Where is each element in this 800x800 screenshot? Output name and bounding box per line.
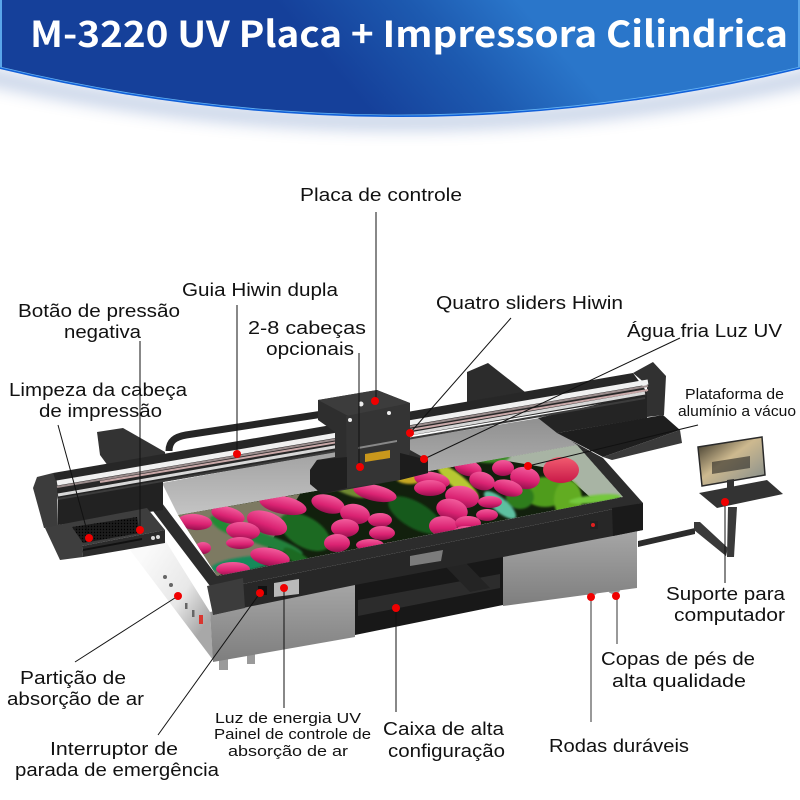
label: copas de pes [601, 649, 755, 691]
label: plataforma de aluminio: Plataforma de [685, 386, 784, 403]
left control platform [45, 508, 165, 560]
right grey panel [503, 531, 637, 606]
table side panel [130, 540, 213, 660]
front switch and panel [258, 579, 299, 597]
gantry beam [33, 362, 666, 528]
label: suporte para computador: computador [674, 605, 785, 625]
label: particao de absorcao: Partição de [20, 668, 126, 688]
printer illustration [33, 362, 682, 670]
label: placa de controle: Placa de controle [300, 185, 462, 205]
label: limpeza da cabeca [9, 380, 188, 421]
label: particao de absorcao [7, 668, 144, 709]
label: limpeza da cabeca: de impressão [39, 401, 162, 421]
label: caixa de alta configuracao: Caixa de alta [383, 719, 505, 739]
label: luz de energia uv e painel: absorção de ar [228, 743, 348, 760]
header banner [0, 0, 800, 122]
table feet [219, 586, 620, 670]
label: cabecas opcionais: opcionais [266, 339, 354, 359]
label: interruptor de parada: Interruptor de [50, 739, 178, 759]
label: cabecas opcionais: 2-8 cabeças [248, 318, 366, 338]
front logo [410, 550, 443, 566]
label: suporte para computador [666, 584, 786, 625]
front grey panel [210, 583, 355, 662]
label: caixa de alta configuracao: configuração [388, 741, 505, 761]
gray bed behind print [162, 418, 577, 515]
tulip print [177, 445, 623, 576]
label: suporte para computador: Suporte para [666, 584, 786, 604]
label: particao de absorcao: absorção de ar [7, 689, 144, 709]
label: interruptor de parada [15, 739, 220, 780]
label: interruptor de parada: parada de emergência [15, 760, 220, 780]
label: plataforma de aluminio: alumínio a vácuo [678, 403, 796, 420]
label: limpeza da cabeca: Limpeza da cabeça [9, 380, 188, 400]
callout dots [85, 397, 729, 612]
label: botao de pressao negativa: negativa [64, 322, 142, 342]
label: cabecas opcionais [248, 318, 366, 359]
label: rodas duraveis: Rodas duráveis [549, 736, 689, 756]
title: M-3220 UV Placa + Impressora Cilindrica [30, 6, 788, 58]
label: guia hiwin dupla: Guia Hiwin dupla [182, 280, 339, 300]
label: luz de energia uv e painel: Painel de controle de [214, 726, 371, 743]
high configuration cabinet [355, 555, 503, 635]
label: botao de pressao negativa [18, 301, 180, 342]
label: luz de energia uv e painel: Luz de energia UV [215, 710, 361, 727]
grey callout lines [591, 596, 617, 722]
cable chain [169, 414, 323, 451]
label: plataforma de aluminio [678, 386, 796, 420]
label: luz de energia uv e painel [214, 710, 371, 760]
rear gantry supports [97, 428, 165, 482]
table frame [150, 433, 643, 615]
computer stand [638, 437, 783, 557]
callout lines [58, 212, 725, 735]
print head carriage [310, 390, 428, 494]
label: copas de pes: alta qualidade [612, 671, 746, 691]
label: agua fria luz uv: Água fria Luz UV [627, 321, 782, 341]
label: botao de pressao negativa: Botão de pressão [18, 301, 180, 321]
label: quatro sliders hiwin: Quatro sliders Hiwin [436, 293, 623, 313]
red button [590, 521, 598, 529]
label: caixa de alta configuracao [383, 719, 505, 761]
label: copas de pes: Copas de pés de [601, 649, 755, 669]
right side platform [538, 393, 682, 460]
side panel ports [163, 575, 203, 624]
